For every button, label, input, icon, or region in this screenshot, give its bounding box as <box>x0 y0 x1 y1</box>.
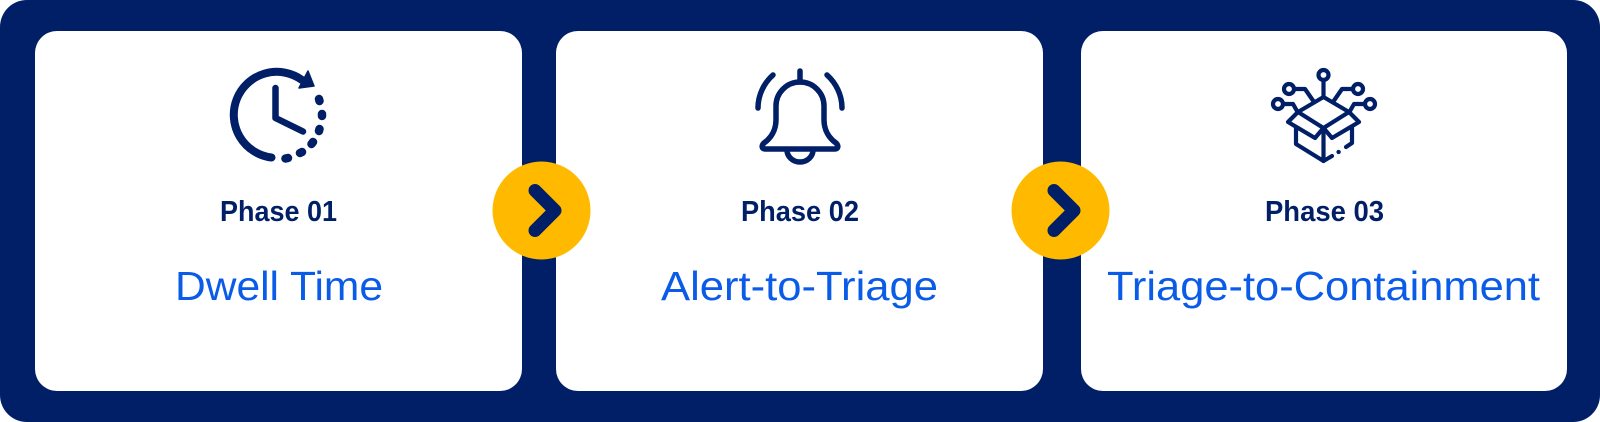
heading: Alert-to-Triage: Alert-to-Triage <box>661 263 938 309</box>
panel: phase 01 <box>35 31 522 391</box>
icon: ringing bell <box>758 71 842 162</box>
panel: phase 03 <box>1081 31 1567 391</box>
icon: box with network nodes <box>1273 70 1375 161</box>
panel: phase 02 <box>556 31 1043 391</box>
heading: Triage-to-Containment: Triage-to-Containment <box>1107 263 1541 309</box>
label: Phase 03: Phase 03 <box>1265 196 1384 228</box>
arrow: phase 01 to 02 <box>492 162 590 260</box>
arrow: phase 02 to 03 <box>1012 162 1110 260</box>
label: Phase 01: Phase 01 <box>220 196 337 228</box>
label: Phase 02: Phase 02 <box>741 196 859 228</box>
icon: clock with circular arrow <box>234 71 322 158</box>
heading: Dwell Time: Dwell Time <box>175 263 383 309</box>
